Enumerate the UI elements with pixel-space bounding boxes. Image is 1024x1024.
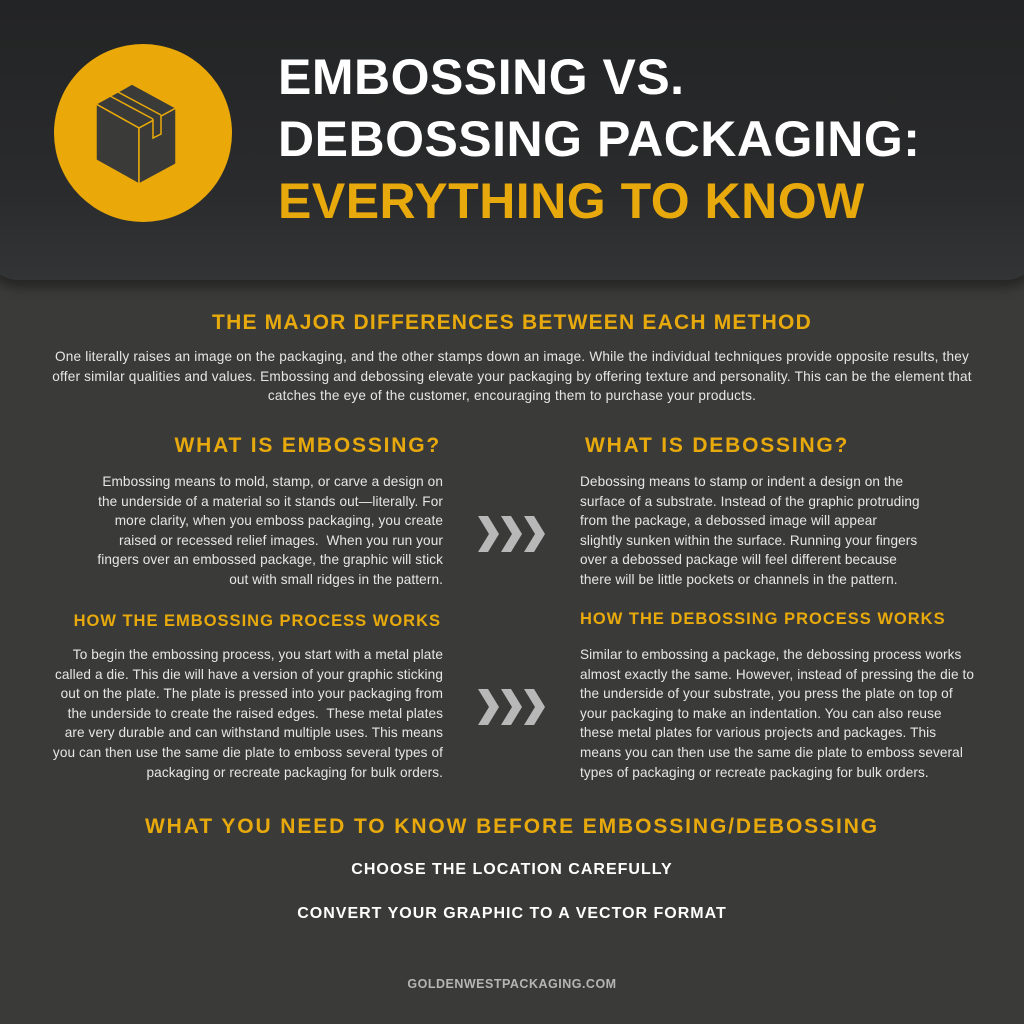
intro text: catches the eye of the customer, encouraging them to purchase your products. bbox=[268, 388, 756, 403]
heading: debossing process: HOW THE DEBOSSING PROCESS WORKS bbox=[580, 610, 946, 628]
text: debossing process: your packaging to make an indentation. You can also reuse bbox=[580, 706, 942, 721]
text: debossing: slightly sunken within the surface. Running your fingers bbox=[580, 533, 917, 548]
arrow: chevrons 1 bbox=[478, 516, 545, 552]
tip 2: CONVERT YOUR GRAPHIC TO A VECTOR FORMAT bbox=[297, 905, 727, 922]
text: debossing process: means you can then use the same die plate to emboss several bbox=[580, 745, 963, 760]
text: embossing process: To begin the embossing process, you start with a metal plate bbox=[73, 647, 443, 662]
text: embossing: out with small ridges in the pattern. bbox=[229, 572, 443, 587]
heading: what is debossing: WHAT IS DEBOSSING? bbox=[585, 434, 849, 457]
tip 1: CHOOSE THE LOCATION CAREFULLY bbox=[351, 861, 673, 878]
title: EMBOSSING VS. bbox=[278, 49, 685, 105]
text: debossing bbox=[580, 474, 920, 587]
text: debossing process: Similar to embossing a package, the debossing process works bbox=[580, 647, 961, 662]
text: embossing process bbox=[52, 647, 443, 780]
heading: embossing process: HOW THE EMBOSSING PROCESS WORKS bbox=[74, 612, 441, 630]
intro text: One literally raises an image on the packaging, and the other stamps down an image. While the individual techniques provide opposite results, they bbox=[55, 349, 969, 364]
text: debossing: Debossing means to stamp or indent a design on the bbox=[580, 474, 903, 489]
text: debossing process: types of packaging or recreate packaging for bulk orders. bbox=[580, 765, 929, 780]
title bbox=[278, 49, 920, 229]
text: embossing process: out on the plate. The plate is pressed into your packaging from bbox=[61, 686, 443, 701]
text: debossing: over a debossed package will feel different because bbox=[580, 552, 897, 567]
text: embossing bbox=[97, 474, 443, 587]
text: debossing: there will be little pockets or channels in the pattern. bbox=[580, 572, 898, 587]
text: embossing process: called a die. This die will have a version of your graphic sticking bbox=[55, 667, 443, 682]
text: embossing process: are very durable and can withstand multiple uses. This means bbox=[65, 725, 443, 740]
text: debossing process: these metal plates for various projects and packages. This bbox=[580, 725, 936, 740]
text: embossing: Embossing means to mold, stamp, or carve a design on bbox=[102, 474, 443, 489]
arrow: chevrons 2 bbox=[478, 689, 545, 725]
heading: major differences: THE MAJOR DIFFERENCES BETWEEN EACH METHOD bbox=[212, 311, 812, 334]
icon: box in gold circle bbox=[54, 44, 232, 222]
title: EVERYTHING TO KNOW bbox=[278, 173, 865, 229]
text: embossing process: packaging or recreate packaging for bulk orders. bbox=[147, 765, 443, 780]
text: embossing: fingers over an embossed package, the graphic will stick bbox=[97, 552, 443, 567]
text: debossing: surface of a substrate. Instead of the graphic protruding bbox=[580, 494, 920, 509]
footer url: GOLDENWESTPACKAGING.COM bbox=[407, 977, 617, 991]
text: embossing: the underside of a material so it stands out—literally. For bbox=[98, 494, 443, 509]
text: debossing process bbox=[580, 647, 974, 780]
intro text bbox=[52, 349, 972, 403]
heading: what is embossing: WHAT IS EMBOSSING? bbox=[174, 434, 441, 457]
heading: what you need to know: WHAT YOU NEED TO KNOW BEFORE EMBOSSING/DEBOSSING bbox=[145, 815, 879, 838]
intro text: offer similar qualities and values. Embossing and debossing elevate your packaging by offering texture and personality. This can be the element that bbox=[52, 369, 972, 384]
header panel bbox=[0, 0, 1024, 280]
text: debossing process: almost exactly the same. However, instead of pressing the die to bbox=[580, 667, 974, 682]
text: embossing process: the underside to create the raised edges. These metal plates bbox=[68, 706, 443, 721]
text: debossing process: the underside of your substrate, you press the plate on top of bbox=[580, 686, 953, 701]
text: debossing: from the package, a debossed image will appear bbox=[580, 513, 877, 528]
title: DEBOSSING PACKAGING: bbox=[278, 111, 920, 167]
text: embossing process: you can then use the same die plate to emboss several types of bbox=[53, 745, 443, 760]
text: embossing: raised or recessed relief images. When you run your bbox=[119, 533, 443, 548]
text: embossing: more clarity, when you emboss packaging, you create bbox=[115, 513, 443, 528]
